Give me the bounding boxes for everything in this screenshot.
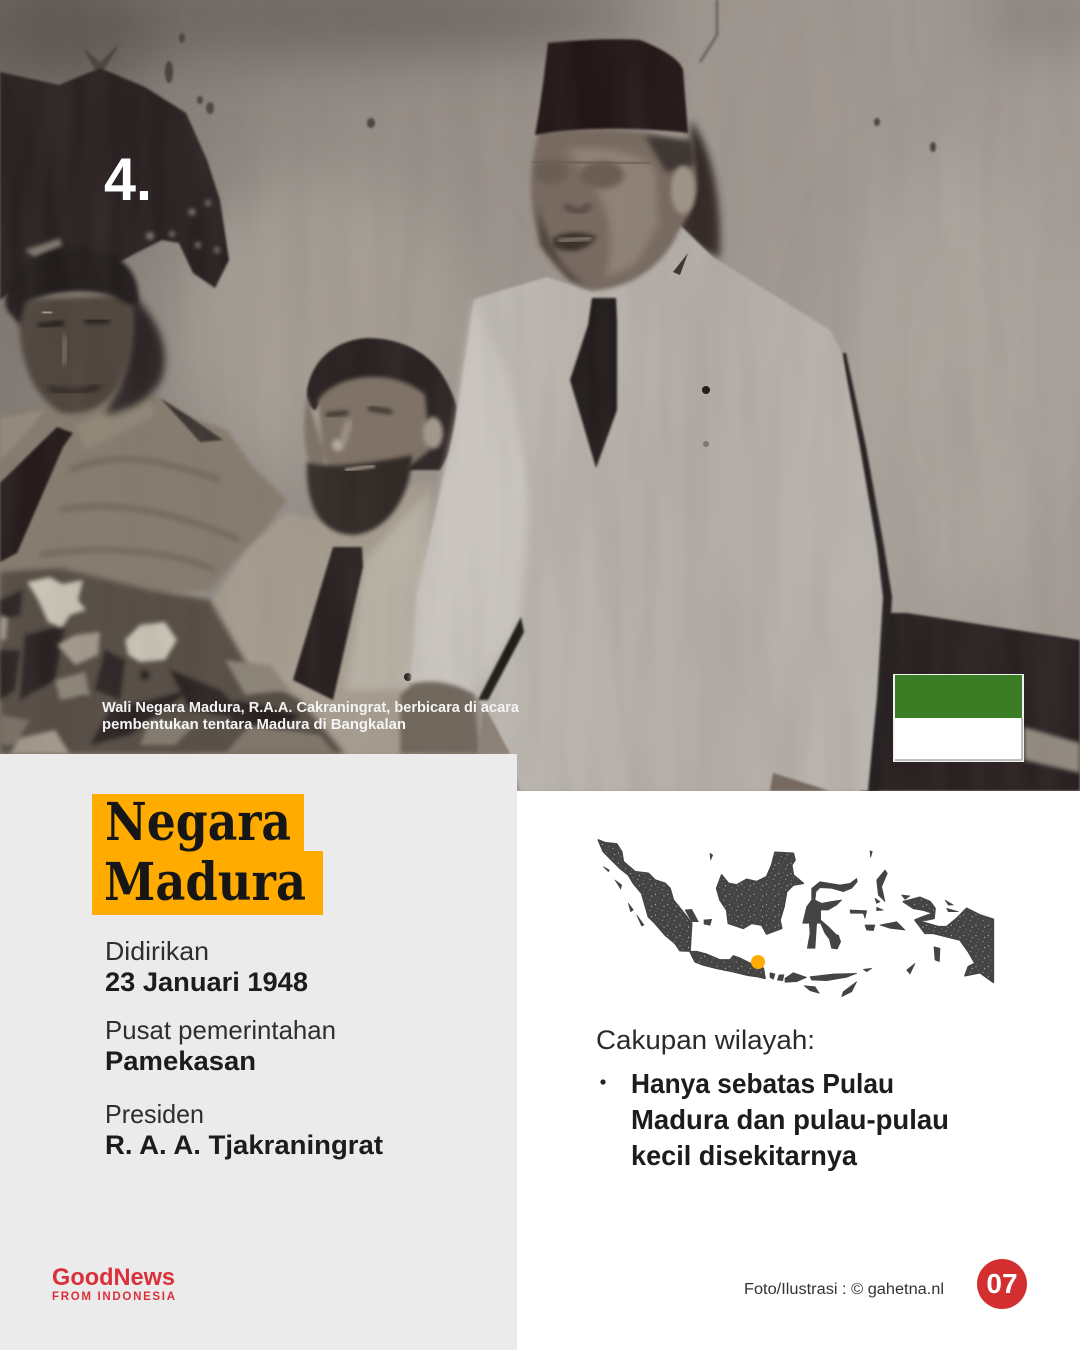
title: Madura [104,852,306,913]
territory coverage list [600,1068,949,1171]
panel: state details [0,754,517,1350]
territory coverage list: Hanya sebatas Pulau [631,1068,894,1099]
section number: 4. [104,146,152,213]
photo caption: Wali Negara Madura, R.A.A. Cakraningrat, berbicara di acara [102,700,520,716]
Bangka, Belitung, Mentawai [603,867,712,926]
founding date [105,936,308,997]
seated man, left [0,248,287,600]
photo caption [102,700,520,733]
wall decoration [0,68,229,300]
map of Indonesia [598,840,993,997]
logo: GoodNews from Indonesia: FROM INDONESIA [52,1291,175,1303]
founding date: 23 Januari 1948 [105,967,308,997]
wall marks [83,0,936,152]
territory coverage heading: Cakupan wilayah: [596,1025,815,1055]
president: Presiden [105,1099,204,1129]
page number: 07 [986,1268,1018,1299]
standing man in white suit [400,39,892,791]
president: R. A. A. Tjakraningrat [105,1130,383,1160]
flag of Madura [893,674,1024,762]
logo: GoodNews from Indonesia [52,1264,175,1303]
founding date: Didirikan [105,936,209,966]
seat of government [105,1015,336,1076]
president [105,1099,383,1160]
Maluku [850,910,940,962]
logo: GoodNews from Indonesia: GoodNews [52,1264,175,1291]
seat of government: Pamekasan [105,1046,256,1076]
photo credit: Foto/Ilustrasi : © gahetna.nl [744,1281,944,1298]
panel: historical photograph [0,0,1080,791]
photo grain [4,64,706,726]
page number [977,1259,1027,1309]
seated bearded man [200,338,457,754]
dark lower wall panel [860,613,1080,791]
territory coverage list: Madura dan pulau-pulau [631,1104,949,1135]
Sulawesi [803,878,857,948]
Lesser Sunda islands [770,973,857,982]
seat of government: Pusat pemerintahan [105,1015,336,1045]
table flowers [0,568,345,754]
territory coverage list: kecil disekitarnya [631,1140,857,1171]
title [92,792,323,915]
title: Negara [105,792,291,853]
photo caption: pembentukan tentara Madura di Bangkalan [102,717,406,733]
